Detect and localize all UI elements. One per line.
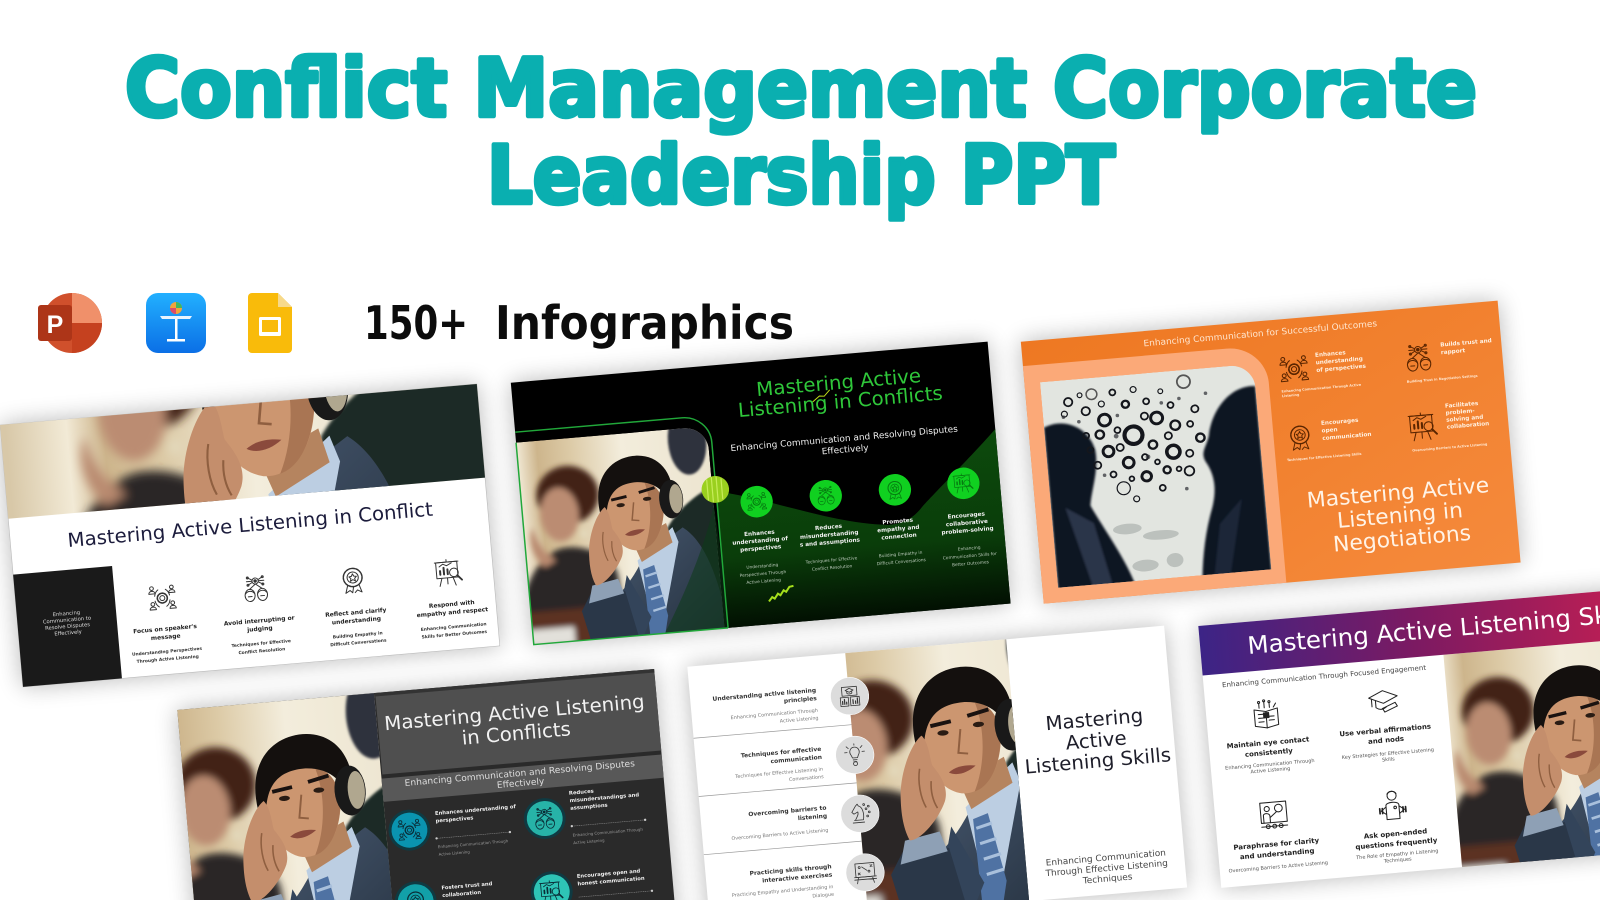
- slide title: [1306, 473, 1494, 559]
- labels: misunderstanding: [800, 530, 859, 541]
- item titles: Facilitates: [1445, 401, 1479, 410]
- labels: Reflect and clarify: [325, 608, 387, 619]
- labels: Promotes: [882, 518, 914, 526]
- icon circles: [739, 466, 981, 519]
- item subs: Overcoming Barriers to Active Listening: [1412, 442, 1488, 453]
- row titles: Techniques for effective: [741, 747, 822, 760]
- sublabels: Better Outcomes: [952, 559, 990, 568]
- item subs: The Role of Empathy in Listening: [1355, 848, 1439, 861]
- labels: Enhances: [744, 530, 776, 538]
- item subs: Techniques: [1383, 856, 1412, 865]
- panel: slide 2 black green: [500, 330, 1022, 656]
- panel: slide 3 orange: [1021, 301, 1521, 604]
- dividers and subs: Enhancing Communication Through: [438, 838, 509, 849]
- sublabels: Skills for Better Outcomes: [421, 629, 488, 640]
- panel: slide 1 white conflict: [0, 372, 511, 698]
- item titles: Use verbal affirmations: [1339, 723, 1431, 738]
- sublabels: Conflict Resolution: [812, 563, 853, 573]
- dividers and subs: Active Listening: [573, 838, 605, 845]
- heading: 150+ Infographics: [364, 296, 794, 350]
- slide title: [1020, 702, 1172, 779]
- item titles: consistently: [1245, 747, 1294, 759]
- item titles: collaboration: [442, 890, 482, 899]
- row titles: communication: [770, 755, 822, 765]
- sublabels: [132, 621, 488, 665]
- item titles: Maintain eye contact: [1226, 735, 1310, 750]
- item titles: Encourages: [1321, 418, 1359, 427]
- item titles: of perspectives: [1316, 364, 1367, 374]
- row subs: [716, 708, 835, 900]
- labels: [731, 511, 994, 554]
- icon: PowerPoint: [38, 293, 102, 353]
- black box: Communication to: [43, 616, 91, 626]
- item titles: Encourages open and: [577, 868, 641, 880]
- labels: perspectives: [740, 544, 782, 554]
- slide title: Active: [1065, 727, 1128, 755]
- item titles: and nods: [1368, 735, 1404, 746]
- sublabels: Difficult Conversations: [330, 638, 387, 648]
- slide title: Mastering Active Listening in Conflict: [67, 498, 434, 552]
- slide title: [735, 363, 944, 422]
- title: Conflict Management Corporate: [125, 42, 1477, 135]
- sublabels: Through Active Listening: [136, 654, 199, 665]
- item titles: Builds trust and: [1440, 338, 1492, 349]
- item subs: Active Listening: [1250, 766, 1291, 775]
- sublabels: Techniques for Effective: [231, 638, 291, 649]
- green frame: [515, 415, 728, 645]
- black box: Resolve Disputes: [45, 622, 91, 632]
- item titles: perspectives: [435, 815, 474, 825]
- subtitle band: [381, 755, 664, 802]
- item subs: Enhancing Communication Through Active: [1281, 383, 1362, 394]
- item subs: Overcoming Barriers to Active Listening: [1228, 860, 1328, 875]
- sublabels: Understanding: [746, 562, 779, 571]
- item titles: Enhances understanding of: [435, 804, 517, 817]
- slide subtitle: Through Effective Listening: [1044, 859, 1168, 879]
- sublabels: Communication Skills for: [943, 551, 997, 562]
- slide title: Negotiations: [1332, 521, 1472, 558]
- slide subtitle: Techniques: [1081, 872, 1133, 887]
- item titles: Enhances: [1315, 350, 1347, 359]
- slide subtitle: Enhancing Communication: [1045, 848, 1166, 869]
- item titles: honest communication: [577, 876, 645, 887]
- labels: empathy and respect: [417, 607, 489, 619]
- header text: Enhancing Communication for Successful Outcomes: [1143, 319, 1378, 349]
- panel: slide 4 dark: [166, 658, 688, 900]
- title: Leadership PPT: [487, 129, 1115, 222]
- item titles: understanding: [1315, 356, 1363, 366]
- item subs: [1219, 747, 1444, 878]
- title band: in Conflicts: [461, 718, 572, 750]
- labels: problem-solving: [941, 526, 994, 536]
- slide title: Mastering Active: [755, 364, 922, 401]
- item circles: [387, 796, 574, 900]
- icon: Keynote: [146, 293, 206, 353]
- item titles: and understanding: [1240, 847, 1315, 861]
- item titles: collaboration: [1447, 421, 1490, 431]
- photo: [845, 639, 1030, 900]
- black box: [13, 566, 122, 687]
- row subs: Overcoming Barriers to Active Listening: [731, 828, 829, 842]
- item titles: rapport: [1441, 348, 1466, 356]
- subtitle band: Effectively: [497, 777, 545, 791]
- item titles: solving and: [1446, 415, 1484, 424]
- sublabels: Difficult Conversations: [876, 557, 927, 567]
- photo: [1444, 641, 1600, 868]
- photo: silhouettes and gears: [1040, 364, 1272, 591]
- panel: slide 5 white rows: [676, 614, 1198, 900]
- title: [125, 42, 1477, 222]
- sublabels: Building Empathy in: [879, 550, 923, 559]
- row subs: Practicing Empathy and Understanding in: [732, 884, 834, 899]
- title band: [374, 669, 661, 775]
- item titles: [1224, 723, 1441, 862]
- photo: close-up: [0, 384, 485, 519]
- labels: collaborative: [946, 519, 988, 528]
- item subs: [1281, 372, 1488, 463]
- row icon circles: [829, 676, 886, 893]
- row subs: Dialogue: [812, 892, 834, 899]
- sublabels: Enhancing: [958, 545, 981, 553]
- dividers and subs: [435, 819, 653, 900]
- striped circle: [700, 475, 730, 504]
- sublabels: Understanding Perspectives: [132, 646, 203, 658]
- row subs: Enhancing Communication Through: [730, 708, 818, 721]
- labels: Focus on speaker's: [133, 624, 198, 635]
- sublabels: [739, 543, 998, 587]
- labels: message: [151, 634, 181, 642]
- icon: PowerPoint: P: [47, 311, 63, 339]
- item subs: Building Trust in Negotiation Settings: [1407, 374, 1478, 384]
- labels: Reduces: [815, 524, 843, 532]
- item titles: problem-: [1445, 408, 1476, 417]
- black box: Enhancing: [52, 610, 80, 618]
- row titles: principles: [784, 696, 818, 705]
- item titles: questions frequently: [1355, 836, 1438, 851]
- sublabels: Conflict Resolution: [238, 646, 286, 656]
- subtitle: Enhancing Communication Through Focused Engagement: [1222, 664, 1427, 689]
- row titles: Overcoming barriers to: [748, 806, 827, 818]
- row titles: listening: [798, 814, 827, 822]
- sublabels: Enhancing Communication: [421, 621, 487, 633]
- slide title: Mastering Active: [1306, 473, 1490, 514]
- sublabels: Techniques for Effective: [804, 555, 858, 566]
- sublabels: Building Empathy in: [333, 630, 383, 640]
- labels: connection: [881, 533, 917, 542]
- item titles: misunderstandings and: [569, 792, 640, 804]
- photo: [177, 693, 392, 900]
- item subs: Skills: [1382, 756, 1395, 763]
- icons row: [148, 558, 462, 611]
- labels: [133, 599, 489, 644]
- header band: [1198, 585, 1600, 675]
- item titles: Paraphrase for clarity: [1233, 837, 1320, 852]
- labels: judging: [246, 626, 273, 634]
- slide title: Listening in: [1336, 498, 1464, 534]
- row titles: interactive exercises: [762, 872, 833, 884]
- item subs: Enhancing Communication Through: [1225, 758, 1315, 772]
- labels: Avoid interrupting or: [224, 616, 295, 628]
- item titles: Reduces: [569, 789, 594, 797]
- item titles: [434, 785, 647, 899]
- black box: Effectively: [54, 629, 82, 637]
- item titles: [1315, 338, 1499, 442]
- item subs: Techniques for Effective Listening Skills: [1287, 452, 1362, 462]
- subtitle: Effectively: [821, 444, 869, 457]
- sublabels: Perspectives Through: [739, 569, 787, 579]
- labels: empathy and: [877, 525, 920, 534]
- icon: Google Slides: [248, 293, 292, 353]
- subtitle: Enhancing Communication and Resolving Disputes: [730, 425, 959, 454]
- slide title: Mastering: [1045, 704, 1144, 735]
- subtitle band: Enhancing Communication and Resolving Disputes: [404, 759, 636, 789]
- peach panel: [1023, 345, 1286, 604]
- item titles: Fosters trust and: [441, 881, 493, 892]
- slide subtitle: [1043, 848, 1169, 890]
- item icons: [1279, 344, 1437, 452]
- row titles: Practicing skills through: [749, 864, 832, 877]
- green wave: [713, 429, 1011, 628]
- row titles: [712, 688, 833, 887]
- row dividers: [694, 725, 862, 855]
- sublabels: Active Listening: [746, 577, 781, 586]
- item subs: Key Strategies for Effective Listening: [1342, 747, 1434, 761]
- row titles: Understanding active listening: [712, 688, 816, 703]
- title band: Mastering Active Listening: [383, 690, 645, 735]
- row subs: Active Listening: [780, 715, 819, 725]
- labels: Respond with: [429, 600, 475, 610]
- row subs: Conversations: [789, 774, 824, 783]
- slide title: Listening Skills: [1024, 743, 1172, 779]
- labels: understanding of: [732, 536, 789, 547]
- dividers and subs: Enhancing Communication Through: [572, 827, 644, 838]
- photo: [516, 428, 724, 644]
- row subs: Techniques for Effective Listening in: [734, 767, 823, 780]
- slide title: Listening in Conflicts: [737, 382, 944, 422]
- heading: 150+ Infographics: Infographics: [495, 296, 794, 350]
- item icons: [1251, 688, 1408, 830]
- item titles: open: [1321, 427, 1338, 434]
- labels: s and assumptions: [800, 537, 861, 549]
- heading: 150+ Infographics: 150+: [364, 296, 468, 350]
- labels: understanding: [332, 616, 381, 626]
- panel: slide 6 gradient header: [1187, 578, 1600, 899]
- dividers and subs: Active Listening: [438, 849, 471, 857]
- item titles: communication: [1322, 432, 1372, 442]
- labels: Encourages: [947, 511, 986, 521]
- item subs: Listening: [1282, 393, 1300, 398]
- item titles: Ask open-ended: [1364, 827, 1428, 841]
- squiggle: [768, 586, 795, 601]
- item titles: assumptions: [570, 803, 608, 812]
